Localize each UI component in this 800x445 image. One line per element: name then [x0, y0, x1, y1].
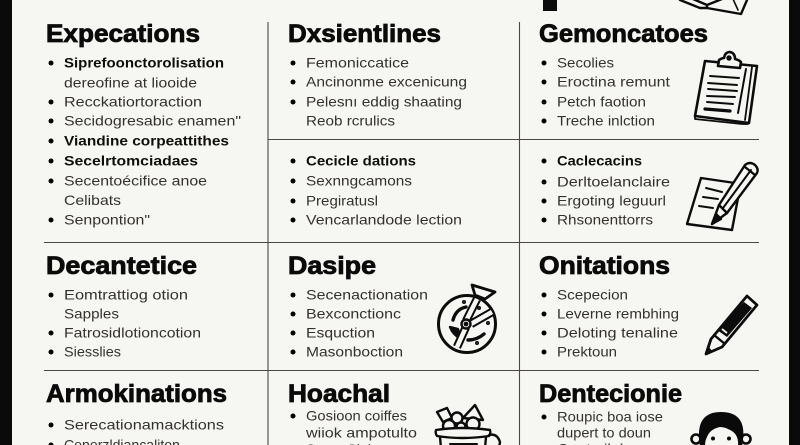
list: Decantetice items: Sapples: [64, 306, 119, 322]
list: Decantetice items: Fatrosidlotioncotion: [64, 324, 201, 340]
heading: Decantetice: Decantetice: [46, 252, 197, 280]
heading: Onitations: Onitations: [539, 252, 670, 280]
panel: Cecicle dations: Pregiratusl: [306, 192, 378, 208]
heading: Hoachal: Hoachal: [288, 380, 390, 408]
list: Gemoncatoes items: Treche inlction: [557, 112, 655, 128]
list: Expecations items: Recckatiortoraction: [64, 94, 202, 110]
panel: Onitations: [539, 252, 679, 360]
list: Armokinations items: [48, 416, 224, 445]
panel: Caclecacins: Rhsonenttorrs: [557, 212, 653, 228]
list: Expecations items: Secentoécifice anoe: [64, 172, 207, 188]
heading: Dasipe: Dasipe: [288, 252, 376, 280]
icon: face with dark hair: [692, 412, 750, 445]
list: Dasipe items: Esquction: [306, 324, 375, 340]
heading: Dentecionie: Dentecionie: [539, 380, 682, 408]
list: Armokinations items: Serecationamacktions: [64, 416, 224, 432]
panel: Armokinations: [46, 380, 227, 445]
list: Hoachal items: Gosioon coiffes: [306, 408, 407, 424]
icon: notepad with pencil: [687, 163, 758, 230]
panel: Expecations: [46, 20, 241, 228]
heading: Armokinations: Armokinations: [46, 380, 227, 408]
list: Dxsientlines items: [290, 54, 467, 128]
panel: Cecicle dations: Cecicle dations: [306, 152, 416, 168]
list: Dasipe items: Bexconctionc: [306, 306, 401, 322]
list: Decantetice items: [48, 286, 201, 360]
panel: Caclecacins: [542, 152, 670, 228]
list: Dentecionie items: Roupic boa iose: [557, 408, 663, 424]
panel: Caclecacins: Caclecacins: [557, 152, 642, 168]
list: Dentecionie items: [542, 408, 663, 445]
heading: Gemoncatoes: Gemoncatoes: [539, 20, 708, 48]
panel: Dxsientlines: [288, 20, 467, 128]
list: Expecations items: [48, 54, 241, 228]
panel: Caclecacins: Derltoelanclaire: [557, 174, 670, 190]
icon: open book (cropped at top): [680, 0, 747, 14]
list: Gemoncatoes items: Secolies: [557, 54, 614, 70]
list: Hoachal items: wiiok ampotulto: [305, 424, 417, 440]
list: Dentecionie items: dupert to doun: [557, 424, 651, 440]
heading: Expecations: Expecations: [46, 20, 200, 48]
panel: Dentecionie: [539, 380, 682, 445]
list: Expecations items: Siprefoonctorolisation: [64, 54, 224, 70]
list: Expecations items: Senpontion": [64, 212, 150, 228]
list: Decantetice items: Siesslies: [64, 344, 121, 360]
list: Expecations items: Secidogresabic enamen": [64, 112, 241, 128]
panel: Dasipe: [288, 252, 428, 360]
icon: clipboard: [695, 52, 757, 124]
icon: disc with tools: [438, 285, 496, 352]
panel: Caclecacins: Ergoting leguurl: [557, 192, 666, 208]
list: Dxsientlines items: Femoniccatice: [306, 54, 409, 70]
panel: Cecicle dations: Sexnngcamons: [306, 172, 412, 188]
heading: Dxsientlines: Dxsientlines: [288, 20, 441, 48]
panel: Hoachal: [288, 380, 417, 445]
top black tab: [543, 0, 557, 11]
list: Gemoncatoes items: [542, 54, 670, 128]
panel: Cecicle dations: Vencarlandode lection: [306, 212, 462, 228]
list: Onitations items: Deloting tenaline: [557, 324, 678, 340]
panel: Decantetice: [46, 252, 201, 360]
icon: pencil: [706, 296, 757, 354]
list: Dasipe items: [290, 286, 428, 360]
list: Expecations items: dereofine at liooide: [64, 74, 197, 90]
list: Gemoncatoes items: Eroctina remunt: [557, 74, 670, 90]
list: Dxsientlines items: Ancinonme excenicung: [306, 74, 467, 90]
list: Gemoncatoes items: Petch faotion: [557, 94, 646, 110]
list: Dasipe items: Masonboction: [306, 344, 403, 360]
list: Onitations items: [542, 286, 679, 360]
panel: Cecicle dations: [290, 152, 462, 228]
list: Onitations items: Leverne rembhing: [557, 306, 679, 322]
list: Dasipe items: Secenactionation: [306, 286, 428, 302]
list: Onitations items: Prektoun: [557, 344, 617, 360]
list: Dxsientlines items: Reob rcrulics: [306, 112, 395, 128]
list: Expecations items: Viandine corpeattithes: [64, 132, 229, 148]
icon: cup with sweets: [436, 405, 500, 445]
list: Dxsientlines items: Pelesnı eddig shaating: [306, 94, 462, 110]
list: Decantetice items: Eomtrattiog otion: [64, 286, 188, 302]
list: Onitations items: Scepecion: [557, 286, 628, 302]
list: Expecations items: Celibats: [64, 192, 121, 208]
list: Expecations items: Secelrtomciadaes: [64, 152, 198, 168]
list: Hoachal items: [290, 408, 417, 445]
